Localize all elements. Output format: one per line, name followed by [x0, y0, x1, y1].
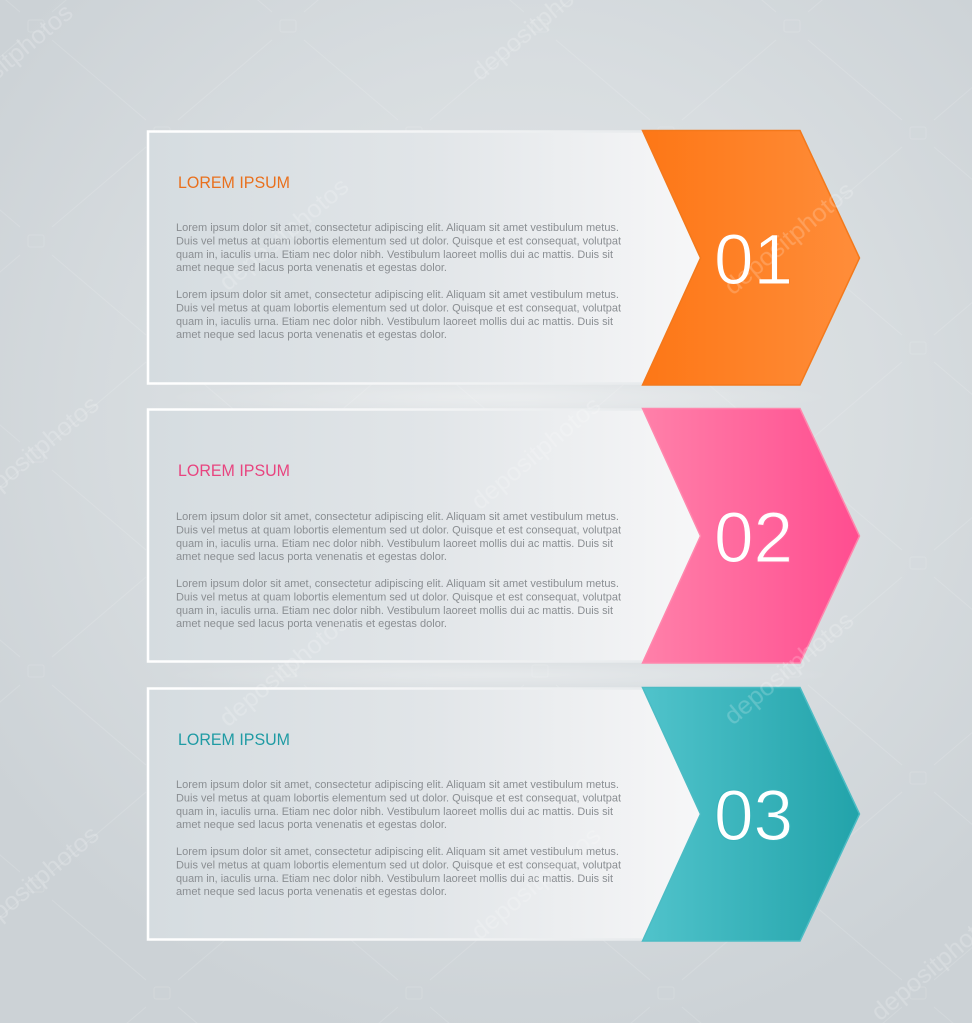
- watermark text: depositphotos: [214, 608, 354, 733]
- panel 01 body text: Lorem ipsum dolor sit amet, consectetur adipiscing elit. Aliquam sit amet vestibulum metus.: [176, 289, 619, 301]
- panel 03 body text: Duis vel metus at quam lobortis elementum sed ut dolor. Quisque et est consequat, volutpat: [176, 860, 622, 872]
- panel 01 background: [148, 131, 700, 384]
- watermark text: depositphotos: [466, 821, 606, 946]
- panel 01 body text: Lorem ipsum dolor sit amet, consectetur adipiscing elit. Aliquam sit amet vestibulum metus.: [176, 222, 619, 234]
- panel 03 frame: [148, 688, 642, 940]
- panel 01 heading: LOREM IPSUM: [178, 173, 290, 192]
- panel 02 body text: Duis vel metus at quam lobortis elementum sed ut dolor. Quisque et est consequat, volutpat: [176, 592, 622, 604]
- watermark text: depositphotos: [214, 172, 354, 297]
- panel 02 frame: [148, 410, 642, 662]
- panel 01 body text: amet neque sed lacus porta venenatis et egestas dolor.: [176, 329, 447, 341]
- panel 02 background: [148, 409, 700, 662]
- panel 01 frame: [148, 132, 642, 384]
- panel 02 body text: quam in, iaculis urna. Etiam nec dolor nibh. Vestibulum laoreet mollis dui ac mattis. Duis sit: [176, 538, 614, 550]
- panel 03 body text: Lorem ipsum dolor sit amet, consectetur adipiscing elit. Aliquam sit amet vestibulum metus.: [176, 846, 619, 858]
- panel 01 body text: [176, 222, 622, 341]
- panel 03 body text: Duis vel metus at quam lobortis elementum sed ut dolor. Quisque et est consequat, volutpat: [176, 792, 622, 804]
- panel 03 body text: amet neque sed lacus porta venenatis et egestas dolor.: [176, 886, 447, 898]
- arrow 02: [642, 408, 860, 663]
- panel 03 body text: quam in, iaculis urna. Etiam nec dolor nibh. Vestibulum laoreet mollis dui ac mattis. Duis sit: [176, 873, 614, 885]
- panel: banner 03: [148, 688, 860, 941]
- watermark text: depositphotos: [719, 176, 859, 301]
- panel 02 body text: Lorem ipsum dolor sit amet, consectetur adipiscing elit. Aliquam sit amet vestibulum metus.: [176, 578, 619, 590]
- panel 03 body text: amet neque sed lacus porta venenatis et egestas dolor.: [176, 819, 447, 831]
- panel 03 background: [148, 688, 700, 940]
- number 01: 01: [714, 221, 793, 300]
- number 02: 02: [714, 499, 793, 578]
- panel 02 body text: Lorem ipsum dolor sit amet, consectetur adipiscing elit. Aliquam sit amet vestibulum metus.: [176, 511, 619, 523]
- panel 01 body text: amet neque sed lacus porta venenatis et egestas dolor.: [176, 262, 447, 274]
- arrow 01: [642, 130, 860, 385]
- panel: banner 02: [148, 408, 860, 663]
- panel 02 heading: LOREM IPSUM: [178, 461, 290, 480]
- panel 02 body text: [176, 511, 622, 630]
- panel 01 body text: Duis vel metus at quam lobortis elementum sed ut dolor. Quisque et est consequat, volutpat: [176, 302, 622, 314]
- panel 01 body text: quam in, iaculis urna. Etiam nec dolor nibh. Vestibulum laoreet mollis dui ac mattis. Duis sit: [176, 249, 614, 261]
- panel 03 body text: quam in, iaculis urna. Etiam nec dolor nibh. Vestibulum laoreet mollis dui ac mattis. Duis sit: [176, 806, 614, 818]
- panel 03 heading: LOREM IPSUM: [178, 730, 290, 749]
- background light glow between panels: [160, 379, 840, 691]
- panel 02 body text: quam in, iaculis urna. Etiam nec dolor nibh. Vestibulum laoreet mollis dui ac mattis. Duis sit: [176, 605, 614, 617]
- watermark text: depositphotos: [466, 391, 606, 516]
- panel 02 body text: Duis vel metus at quam lobortis elementum sed ut dolor. Quisque et est consequat, volutpat: [176, 524, 622, 536]
- panel 01 body text: Duis vel metus at quam lobortis elementum sed ut dolor. Quisque et est consequat, volutpat: [176, 236, 622, 248]
- panel 02 body text: amet neque sed lacus porta venenatis et egestas dolor.: [176, 551, 447, 563]
- panel: banner 01: [148, 130, 860, 385]
- arrow 03: [642, 688, 860, 941]
- panel 01 body text: quam in, iaculis urna. Etiam nec dolor nibh. Vestibulum laoreet mollis dui ac mattis. Duis sit: [176, 316, 614, 328]
- panel 03 body text: Lorem ipsum dolor sit amet, consectetur adipiscing elit. Aliquam sit amet vestibulum metus.: [176, 779, 619, 791]
- watermark text: depositphotos: [719, 606, 859, 731]
- panel 03 body text: [176, 779, 622, 898]
- panel 02 body text: amet neque sed lacus porta venenatis et egestas dolor.: [176, 618, 447, 630]
- number 03: 03: [714, 777, 793, 856]
